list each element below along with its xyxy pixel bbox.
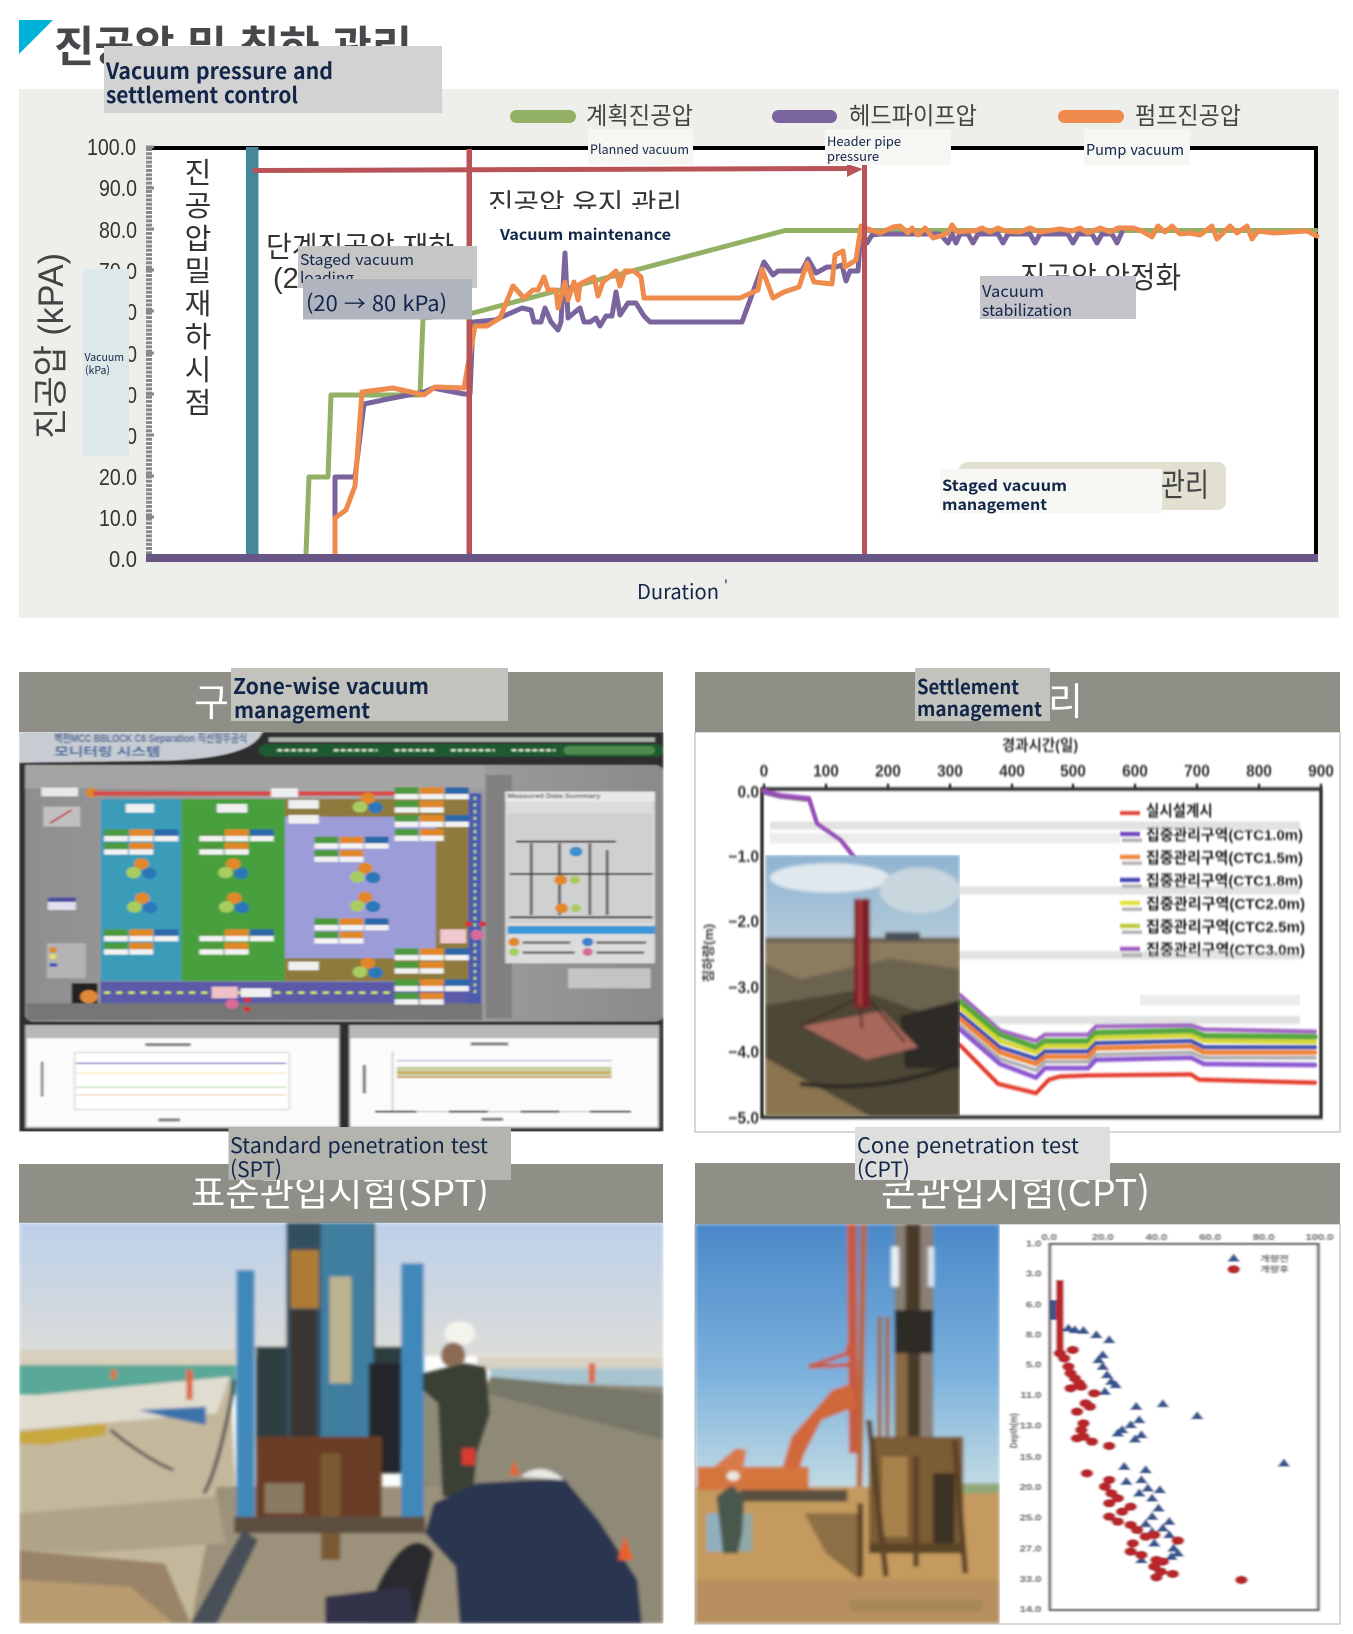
heading bar: CPT <box>695 1127 1340 1224</box>
panel: settlement management <box>695 668 1340 1132</box>
settlement line chart: −2.0 <box>728 914 759 931</box>
y axis tick labels: 0.0 <box>109 546 137 572</box>
annotation: staged vacuum loading: loading <box>300 267 355 288</box>
y axis tick labels: 90.0 <box>99 175 137 201</box>
heading bar: zone-wise: 구 <box>194 683 229 725</box>
vertical annotation: vacuum loading start <box>185 158 211 420</box>
scatter chart: CPT results: 20.0 <box>1020 1483 1042 1493</box>
legend: header pipe pressure: pressure <box>827 146 879 165</box>
settlement line chart: 300 <box>937 763 963 781</box>
annotation: staged vacuum loading: (2 <box>273 263 299 295</box>
settlement line chart: 800 <box>1246 763 1272 781</box>
arrow: vacuum maintenance period <box>253 164 863 177</box>
annotation: vacuum maintenance: Vacuum maintenance <box>499 224 671 245</box>
scatter chart: CPT results: 80.0 <box>1253 1233 1275 1243</box>
legend: settlement zones <box>1120 803 1305 959</box>
vertical annotation: vacuum loading start: 재 <box>185 289 211 321</box>
annotation: staged vacuum loading: (20 → 80 kPa) <box>306 288 447 318</box>
legend <box>510 103 1241 165</box>
red phase line 1 <box>466 149 472 560</box>
scatter chart: CPT results: 20.0 <box>1092 1233 1114 1243</box>
heading bar: settlement: 리 <box>1048 682 1083 724</box>
vertical annotation: vacuum loading start: 압 <box>185 224 211 256</box>
scatter chart: CPT results: Depth(m) <box>1008 1413 1019 1448</box>
scatter chart: CPT results: 13.0 <box>1020 1422 1042 1431</box>
scatter chart: CPT results: 14.0 <box>1020 1605 1042 1615</box>
settlement line chart: 600 <box>1122 763 1148 781</box>
legend: header pipe pressure: Header pipe <box>827 131 901 150</box>
x axis label: Duration <box>637 575 719 605</box>
y axis overlay box: Vacuum <box>84 350 124 365</box>
legend: pump vacuum: 펌프진공압 <box>1135 103 1241 130</box>
settlement line chart: −1.0 <box>728 849 759 866</box>
settlement line chart: −5.0 <box>728 1110 759 1128</box>
settlement line chart: 100 <box>813 763 839 781</box>
legend: settlement zones: 집중관리구역(CTC1.5m) <box>1146 850 1303 867</box>
y axis tick labels: 60.0 <box>99 299 137 325</box>
y axis tick labels: 50.0 <box>99 341 137 367</box>
monitoring dashboard screenshot <box>19 732 664 1132</box>
vertical annotation: vacuum loading start: 점 <box>185 388 211 420</box>
panel: zone-wise vacuum management <box>19 668 664 1132</box>
callout: staged vacuum management: 관리 <box>1161 467 1209 503</box>
y axis overlay box <box>83 269 129 456</box>
scatter chart: CPT results: 0.0 <box>1041 1233 1057 1243</box>
photo: settlement plate <box>765 855 960 1116</box>
scatter chart: CPT results <box>1008 1233 1334 1615</box>
heading bar: zone-wise <box>19 668 663 732</box>
annotation: vacuum maintenance: 진공압 유지 관리 <box>488 189 682 219</box>
scatter chart: CPT results: 11.0 <box>1020 1391 1042 1401</box>
vertical annotation: vacuum loading start: 시 <box>185 355 211 387</box>
heading bar: settlement: management <box>917 693 1043 722</box>
heading bar: zone-wise: management <box>234 694 370 725</box>
scatter chart: CPT results: 15.0 <box>1020 1453 1042 1463</box>
title overlay: English: settlement control <box>106 78 298 110</box>
legend: planned vacuum: 계획진공압 <box>586 103 693 130</box>
x axis label: ' <box>724 577 728 597</box>
pump vacuum line <box>335 225 1317 554</box>
callout: staged vacuum management: management <box>942 493 1047 515</box>
scatter chart: CPT results: 33.0 <box>1020 1575 1042 1585</box>
legend: planned vacuum <box>510 103 693 165</box>
annotation: vacuum stabilization: Vacuum <box>982 278 1044 302</box>
heading bar: SPT: 표준관입시험(SPT) <box>191 1163 489 1217</box>
bar: vacuum start marker <box>246 147 258 555</box>
scatter chart: CPT results: 1.0 <box>1026 1240 1042 1249</box>
y axis tick labels: 70.0 <box>99 258 137 284</box>
vacuum pressure line chart <box>87 134 1318 572</box>
annotation: staged vacuum loading: 단계진공압 재하 <box>266 231 454 264</box>
y axis overlay box: (kPa) <box>85 363 110 378</box>
y axis tick labels: 80.0 <box>99 217 137 243</box>
y axis tick labels: 10.0 <box>99 505 137 531</box>
settlement line chart: 0 <box>760 763 768 781</box>
red phase line 2 <box>862 165 867 560</box>
title accent triangle <box>19 20 53 54</box>
planned vacuum line <box>306 230 1316 554</box>
y axis tick labels: 100.0 <box>87 134 136 160</box>
y axis tick labels: 30.0 <box>99 423 137 449</box>
settlement line chart: 400 <box>999 763 1025 781</box>
settlement line chart: 200 <box>875 763 901 781</box>
photo: CPT rig <box>695 1224 1000 1624</box>
settlement line chart: −4.0 <box>728 1044 759 1062</box>
callout: staged vacuum management <box>940 462 1226 515</box>
vertical annotation: vacuum loading start: 공 <box>185 191 211 223</box>
settlement line chart: 900 <box>1308 763 1334 781</box>
title overlay: English: Vacuum pressure and <box>105 54 333 86</box>
y axis label: 진공압 (kPA) <box>32 253 71 439</box>
heading bar: zone-wise: Zone-wise vacuum <box>233 670 429 701</box>
legend: pump vacuum <box>1058 103 1241 165</box>
photo: SPT drilling rig with workers <box>19 1223 664 1624</box>
heading bar: settlement: Settlement <box>917 671 1020 700</box>
legend: planned vacuum: Planned vacuum <box>590 139 689 158</box>
legend: settlement zones: 집중관리구역(CTC2.0m) <box>1146 896 1305 913</box>
heading bar: CPT: Cone penetration test <box>857 1130 1079 1160</box>
legend: pump vacuum: Pump vacuum <box>1086 139 1184 160</box>
scatter chart: CPT results: 40.0 <box>1146 1233 1168 1243</box>
monitoring dashboard screenshot: 벽천MCC BBLOCK C6 Separation 직선형무공식 <box>54 732 247 745</box>
legend: header pipe pressure <box>772 103 977 165</box>
vertical annotation: vacuum loading start: 진 <box>185 158 211 190</box>
heading bar: CPT: (CPT) <box>857 1154 910 1184</box>
legend: settlement zones: 실시설계시 <box>1146 803 1213 820</box>
title overlay: English <box>104 46 442 113</box>
scatter chart: CPT results: 100.0 <box>1306 1233 1334 1243</box>
scatter chart: CPT results: 5.0 <box>1026 1360 1042 1370</box>
settlement line chart: 0.0 <box>737 784 759 801</box>
monitoring dashboard screenshot: 모니터링 시스템 <box>54 745 160 758</box>
heading bar: SPT: Standard penetration test <box>230 1130 488 1160</box>
vertical annotation: vacuum loading start: 밀 <box>185 256 211 288</box>
heading bar: CPT: 콘관입시험(CPT) <box>881 1163 1150 1217</box>
settlement line chart: 침하량(m) <box>701 924 716 982</box>
heading bar: settlement <box>695 668 1340 732</box>
header pipe pressure line <box>335 229 1122 554</box>
legend: settlement zones: 집중관리구역(CTC3.0m) <box>1146 942 1305 959</box>
heading bar: SPT: (SPT) <box>230 1154 282 1184</box>
settlement line chart <box>701 737 1334 1128</box>
y axis tick labels <box>87 134 137 572</box>
settlement line chart: 700 <box>1184 763 1210 781</box>
monitoring dashboard screenshot: Measured Data Summary <box>507 794 601 800</box>
scatter chart: CPT results: 개량후 <box>1260 1264 1289 1274</box>
scatter chart: CPT results: 개량전 <box>1260 1254 1289 1263</box>
y axis tick labels: 20.0 <box>99 464 137 490</box>
heading bar: SPT <box>19 1127 663 1223</box>
annotation: staged vacuum loading: Staged vacuum <box>300 249 414 270</box>
annotation: vacuum maintenance <box>480 189 690 245</box>
vertical annotation: vacuum loading start: 하 <box>185 321 211 354</box>
annotation: staged vacuum loading <box>266 231 477 320</box>
y axis tick labels: 40.0 <box>99 382 137 408</box>
panel: vacuum chart background <box>19 89 1339 618</box>
scatter chart: CPT results: 25.0 <box>1020 1514 1042 1523</box>
legend: settlement zones: 집중관리구역(CTC1.0m) <box>1146 827 1303 844</box>
panel: cone penetration test <box>695 1127 1340 1624</box>
panel: standard penetration test <box>19 1127 664 1624</box>
annotation: vacuum stabilization: 진공압 안정화 <box>1020 262 1181 295</box>
settlement line chart: −3.0 <box>728 980 759 997</box>
legend: settlement zones: 집중관리구역(CTC2.5m) <box>1146 919 1305 936</box>
x axis baseline <box>146 554 1318 562</box>
scatter chart: CPT results: 6.0 <box>1026 1300 1042 1310</box>
legend: settlement zones: 집중관리구역(CTC1.8m) <box>1146 873 1303 890</box>
title (Korean): 진공압 및 침하 관리 <box>54 24 412 72</box>
settlement line chart: 500 <box>1060 763 1086 781</box>
annotation: vacuum stabilization <box>980 262 1181 321</box>
scatter chart: CPT results: 8.0 <box>1026 1330 1042 1340</box>
settlement line chart: 경과시간(일) <box>1002 737 1078 754</box>
scatter chart: CPT results: 3.0 <box>1026 1270 1042 1279</box>
annotation: vacuum stabilization: stabilization <box>982 297 1072 321</box>
scatter chart: CPT results: 27.0 <box>1020 1544 1042 1554</box>
scatter chart: CPT results: 60.0 <box>1199 1233 1221 1243</box>
legend: header pipe pressure: 헤드파이프압 <box>849 103 977 130</box>
callout: staged vacuum management: Staged vacuum <box>942 474 1067 496</box>
